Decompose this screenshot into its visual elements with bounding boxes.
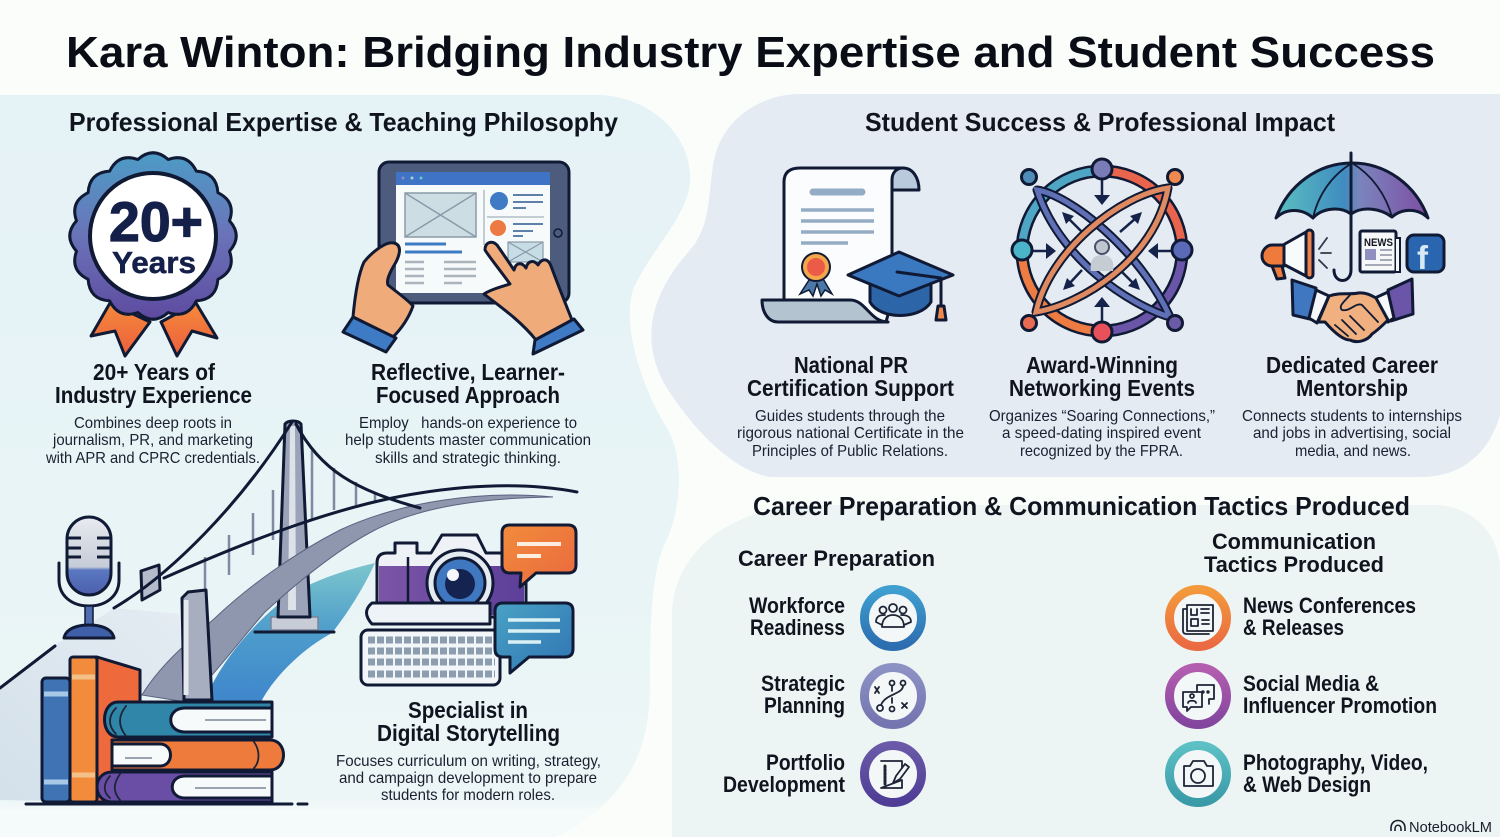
text: award-winning networking events: recognized by the FPRA. [1020,443,1183,460]
item: portfolio development: Portfolio [766,750,845,775]
center person [1091,240,1113,271]
text: specialist in digital storytelling: and campaign development to prepare [339,770,597,787]
text: specialist in digital storytelling: students for modern roles. [381,787,555,804]
text: 20+ years of industry experience [45,359,260,467]
icon: tablet with hands [343,162,583,354]
keyboard [366,603,490,624]
facebook logo [1407,235,1444,276]
icon: right hand pointing [484,242,572,340]
illustration: suspension bridge over river [0,421,577,802]
bridge base [271,617,318,630]
text: 20+ years of industry experience: 20+ Years of [93,359,215,385]
text: specialist in digital storytelling: Specialist in [408,697,528,723]
heading: career preparation column: Career Preparation [738,546,935,571]
megaphone [1283,232,1306,276]
icon: 20+ years rosette badge: 20+ [109,190,203,253]
text: specialist in digital storytelling: Digital Storytelling [377,720,560,746]
item: news conferences and releases [1170,590,1416,646]
text: 20+ years of industry experience: Combines deep roots in [74,415,232,432]
text: national PR certification support: National PR [794,352,908,378]
text: reflective learner-focused approach: help students master communication [345,432,591,449]
item: workforce readiness [749,590,922,646]
icon: umbrella with megaphone, news, facebook and handshake [1262,153,1444,342]
item: workforce readiness: Readiness [750,615,845,640]
text: national PR certification support: rigorous national Certificate in the [737,425,964,442]
heading: communication tactics column: Tactics Produced [1204,552,1384,577]
panel: professional expertise background [0,95,690,837]
item: photography, video and web design: & Web Design [1243,772,1371,797]
icon: left hand [353,243,413,337]
item: strategic planning [761,668,922,724]
item: strategic planning: Strategic [761,671,845,696]
text: dedicated career mentorship: and jobs in advertising, social [1253,425,1451,442]
main tower [278,421,310,617]
cables and deck lines [114,422,292,608]
hangers [205,450,375,590]
text: reflective learner-focused approach: skills and strategic thinking. [375,450,561,467]
ring outline [1022,171,1182,331]
text: award-winning networking events: Award-Winning [1026,352,1178,378]
text: specialist in digital storytelling: Focuses curriculum on writing, strategy, [336,753,601,770]
text: dedicated career mentorship: Connects students to internships [1242,408,1462,425]
facebook logo: f [1417,239,1429,276]
panel: student success background [651,94,1500,477]
item: portfolio development [723,746,922,802]
icon: 20+ years rosette badge: Years [112,245,196,280]
item: social media and influencer promotion: Influencer Promotion [1243,693,1437,718]
arrows [1032,178,1172,322]
river [205,563,375,702]
icon: microphone [59,517,119,638]
camera [377,535,526,617]
icon: camera, keyboard and speech bubbles [361,525,576,685]
text: dedicated career mentorship: Dedicated Career [1266,352,1438,378]
item: news conferences and releases: News Conferences [1243,593,1416,618]
icon: networking ring with nodes and arrows [1012,159,1192,342]
handshake [1292,279,1413,342]
heading: communication tactics column [1204,529,1384,577]
item: photography, video and web design [1170,746,1428,802]
text: dedicated career mentorship: media, and news. [1295,443,1411,460]
icon: right cuff [533,319,583,354]
text: 20+ years of industry experience: journalism, PR, and marketing [52,432,253,449]
text: 20+ years of industry experience: Industry Experience [55,382,252,408]
newspaper [1360,231,1400,272]
icon: left cuff [343,317,396,352]
text: dedicated career mentorship: Mentorship [1296,375,1408,401]
icon: 20+ years rosette badge [70,153,236,356]
item: workforce readiness: Workforce [749,593,845,618]
front tower [182,590,212,700]
text: reflective learner-focused approach: Employ hands-on experience to [359,415,577,432]
text: reflective learner-focused approach [345,359,591,467]
title: Kara Winton: Bridging Industry Expertise and Student Success [66,28,1435,77]
icon: certificate scroll and graduation cap [762,168,953,322]
text: award-winning networking events: Organizes “Soaring Connections,” [989,408,1215,425]
text: national PR certification support: Principles of Public Relations. [752,443,948,460]
newspaper: NEWS [1364,237,1393,249]
land shade under bridge [0,608,213,802]
speech bubble: blue [495,603,573,673]
heading: student success: Student Success & Professional Impact [865,107,1335,137]
item: news conferences and releases: & Releases [1243,615,1344,640]
item: photography, video and web design: Photography, Video, [1243,750,1428,775]
panel: career preparation background [672,505,1500,837]
text: reflective learner-focused approach: Focused Approach [376,382,560,408]
item: strategic planning: Planning [764,693,845,718]
item: social media and influencer promotion: Social Media & [1243,671,1379,696]
icon: stack of books [26,657,307,804]
heading: communication tactics column: Communication [1212,529,1376,554]
logo: NotebookLM: NotebookLM [1409,820,1492,836]
item: portfolio development: Development [723,772,846,797]
text: dedicated career mentorship [1242,352,1462,460]
road arch [142,495,553,702]
text: award-winning networking events: Networking Events [1009,375,1195,401]
item: social media and influencer promotion [1170,668,1437,724]
text: 20+ years of industry experience: with APR and CPRC credentials. [45,450,260,467]
text: award-winning networking events [989,352,1215,460]
heading: professional expertise: Professional Expertise & Teaching Philosophy [69,107,619,137]
umbrella canopy [1276,163,1428,218]
crossed bands [1037,190,1170,317]
heading: career preparation and tactics: Career Preparation & Communication Tactics Produced [753,491,1410,521]
text: specialist in digital storytelling [336,697,601,804]
text: national PR certification support [737,352,964,460]
text: national PR certification support: Certification Support [747,375,954,401]
nodes [1012,159,1192,342]
text: national PR certification support: Guides students through the [755,408,945,425]
speech bubble: orange [502,525,576,587]
text: award-winning networking events: a speed-dating inspired event [1002,425,1202,442]
rear tower [141,565,160,600]
text: reflective learner-focused approach: Reflective, Learner- [371,359,565,385]
